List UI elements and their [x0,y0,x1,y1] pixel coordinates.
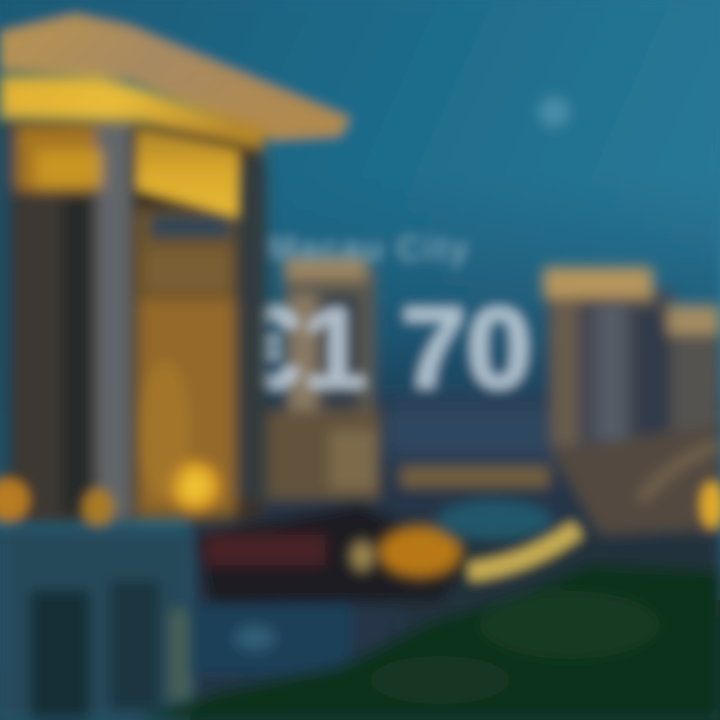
centre tower [245,256,380,500]
moon [539,97,569,127]
blurred headline text: Macau City [268,230,468,268]
water pool [437,500,553,540]
blurred headline text: €1 70 [236,283,532,413]
dark green foliage [140,565,720,720]
water reflection [192,605,352,675]
window block [136,128,240,218]
right towers [544,268,720,535]
lower city band [190,400,720,720]
left columns [0,120,132,520]
foreground blue building [0,528,192,720]
roof fascia [0,76,268,150]
large foreground building [0,14,350,528]
yellow curved walkway [468,528,578,572]
blurred headline text [236,230,532,413]
amber dome [350,526,462,578]
roof top [0,14,350,140]
waterfront lights and boats [195,466,720,605]
dark boat [195,505,470,605]
bridge lights [400,466,550,488]
lobby glow [0,360,227,528]
right edge glow [700,481,720,529]
building body [0,120,267,520]
